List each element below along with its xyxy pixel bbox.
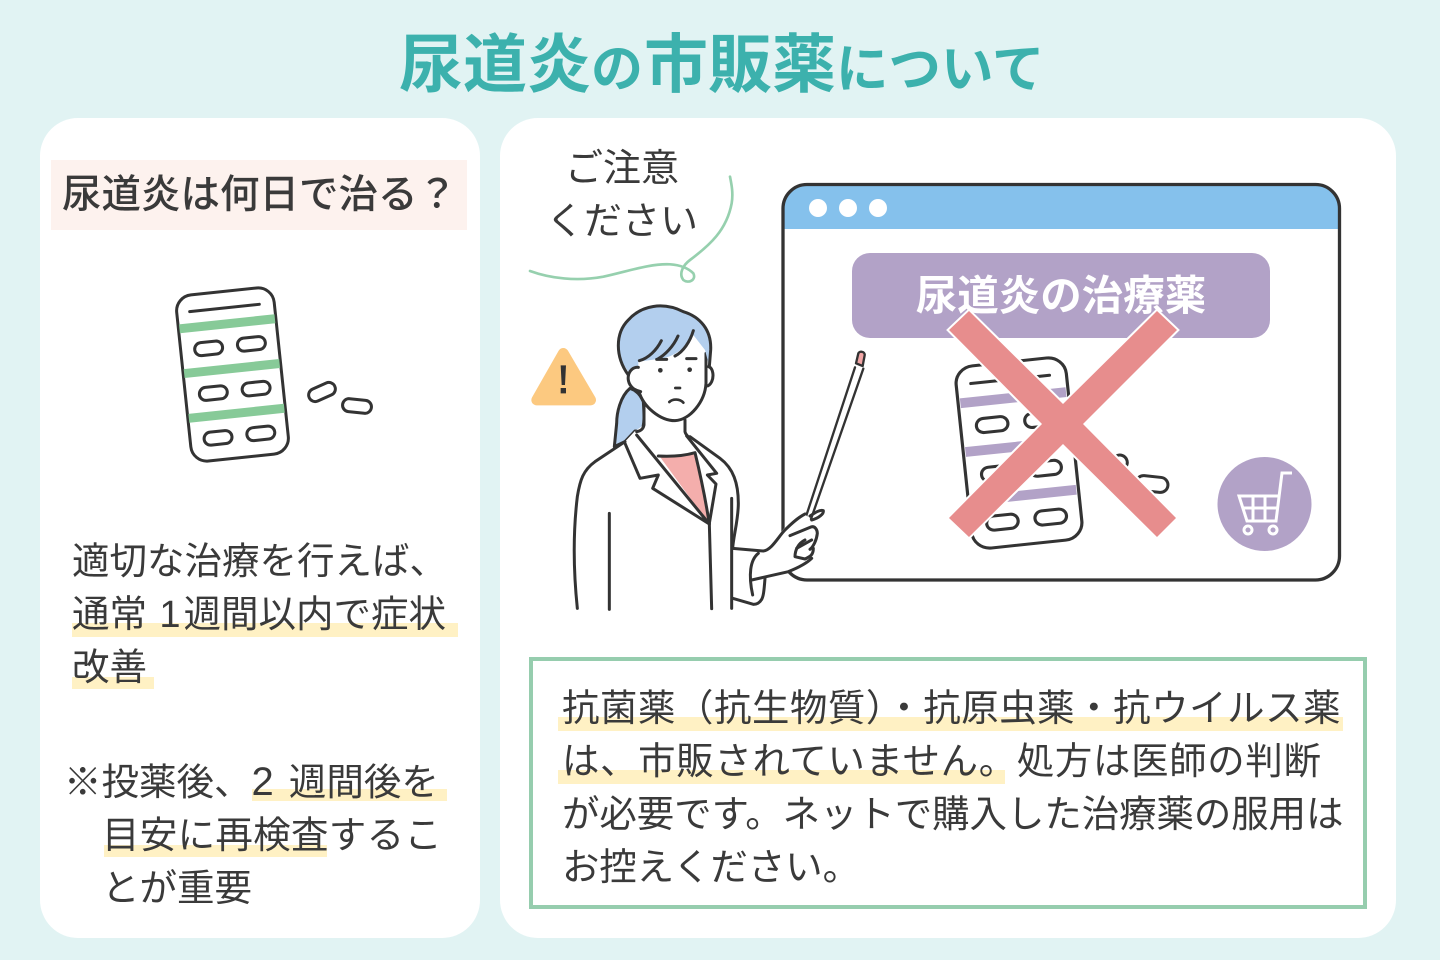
heading: how many days [51,160,467,230]
callout: green box notice [529,657,1367,909]
text: treatment duration: 改善 [72,646,147,688]
speech text: please note: ご注意 [565,148,679,190]
title: 尿道炎の市販薬について [399,29,1044,101]
heading: how many days: 尿道炎は何日で治る？ [62,173,457,217]
text: recheck note: ※投薬後、2 週間後を [64,760,439,804]
callout: green box notice: が必要です。ネットで購入した治療薬の服用は [562,793,1343,835]
callout: green box notice: お控えください。 [562,846,860,888]
panel: right card [500,118,1396,938]
panel: left card [40,118,480,938]
text: recheck note [64,760,447,909]
text: recheck note: とが重要 [102,867,252,909]
speech text: please note [546,148,698,243]
text: recheck note: 目安に再検査するこ [102,814,442,856]
pointer [803,367,863,527]
ponytail [614,388,644,447]
neck and head [637,402,690,438]
shirt [659,453,709,523]
coat [574,402,738,608]
text: treatment duration [72,540,458,689]
warning sign [537,353,591,400]
browser window illustration: 尿道炎の治療薬 [916,272,1206,319]
speech text: please note: ください [546,201,698,243]
callout: green box notice: は、市販されていません。処方は医師の判断 [562,740,1322,782]
sleeve and hand [751,514,818,580]
callout: green box notice: 抗菌薬（抗生物質）・抗原虫薬・抗ウイルス薬 [562,687,1341,729]
squiggle speech line [530,177,732,282]
text: treatment duration: 適切な治療を行えば、 [72,540,447,582]
text: treatment duration: 通常 1週間以内で症状 [72,593,446,636]
